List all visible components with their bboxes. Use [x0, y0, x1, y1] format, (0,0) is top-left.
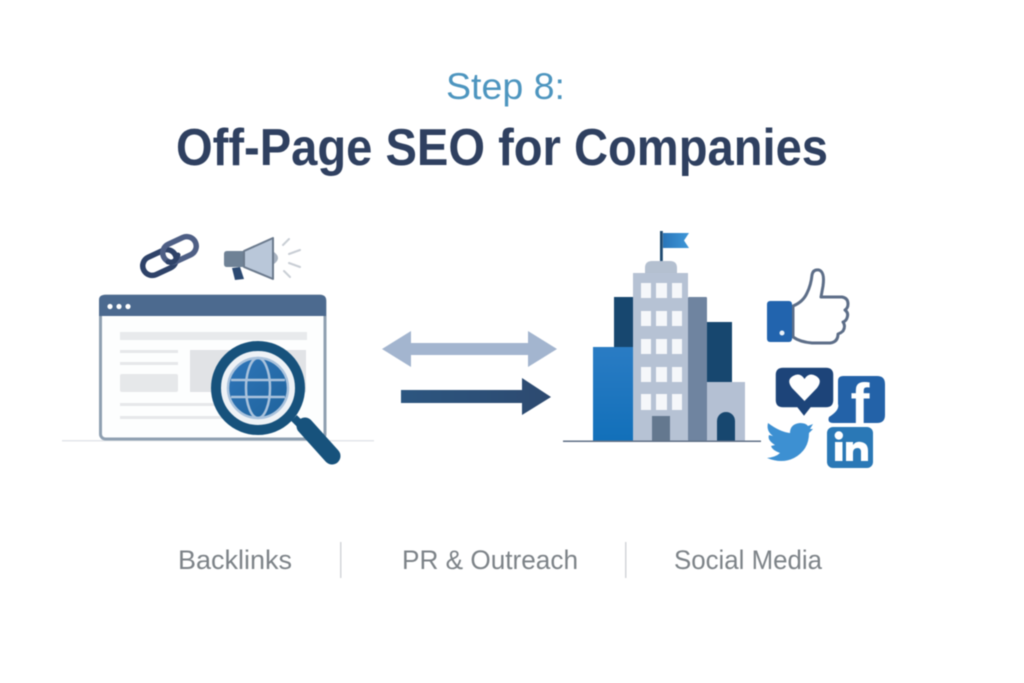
divider: [625, 542, 626, 578]
icon: company building: [563, 231, 761, 442]
icon: facebook: [828, 372, 885, 436]
label: backlinks: Backlinks: [178, 545, 292, 575]
arrow: two-way light: [382, 331, 557, 367]
icon: heart speech bubble: [775, 367, 834, 417]
divider: [340, 542, 342, 578]
arrow: right dark: [401, 378, 551, 415]
icon: browser window: [99, 295, 326, 439]
label: social media: Social Media: [674, 545, 823, 575]
label: PR and outreach: PR & Outreach: [402, 545, 578, 575]
ground line left: [62, 440, 374, 442]
icon: twitter bird: [767, 423, 813, 461]
icon: megaphone: [224, 238, 300, 280]
title: Off-Page SEO for Companies: [176, 119, 828, 177]
icon: chain link: [140, 233, 199, 279]
icon: thumbs up: [767, 270, 848, 343]
step label: Step 8:: [446, 66, 565, 107]
icon: magnifying glass with globe: [216, 346, 332, 456]
icon: facebook: f: [851, 372, 871, 436]
icon: linkedin: [827, 427, 873, 468]
